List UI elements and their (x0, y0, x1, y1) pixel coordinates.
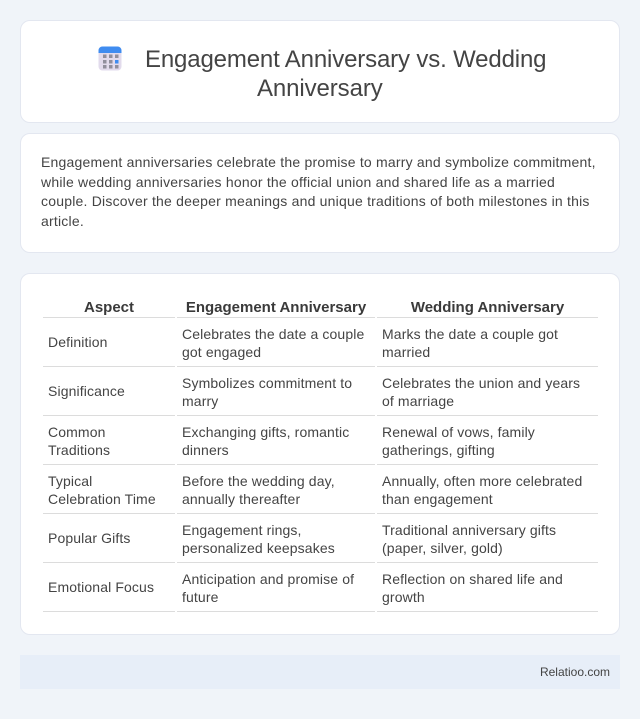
row: Significance: of marriage (382, 393, 454, 409)
row: Definition: Marks the date a couple got (382, 326, 558, 342)
row: Common Traditions: dinners (182, 442, 229, 458)
title: Anniversary (257, 75, 383, 102)
row: Typical Celebration Time: Annually, often more celebrated (382, 473, 582, 489)
row: Significance: Significance (48, 383, 125, 399)
row: Popular Gifts: Traditional anniversary gifts (382, 522, 556, 538)
row: Popular Gifts: Engagement rings, (182, 522, 302, 538)
row: Common Traditions: Renewal of vows, family (382, 424, 535, 440)
row: Popular Gifts (48, 522, 556, 556)
row: Typical Celebration Time: annually thereafter (182, 491, 300, 507)
row: Definition: Definition (48, 334, 108, 350)
row: Definition: married (382, 344, 430, 360)
intro text: article. (41, 213, 84, 229)
footer bar (20, 655, 620, 689)
row: Emotional Focus: Emotional Focus (48, 579, 154, 595)
row: Popular Gifts: personalized keepsakes (182, 540, 335, 556)
row: Definition (48, 326, 558, 360)
row: Definition: got engaged (182, 344, 261, 360)
panel: introduction (20, 133, 620, 253)
row: Significance: Celebrates the union and years (382, 375, 580, 391)
row: Common Traditions: gatherings, gifting (382, 442, 495, 458)
row: Significance: marry (182, 393, 218, 409)
table header: Wedding Anniversary (411, 299, 564, 316)
row: Popular Gifts: Popular Gifts (48, 530, 130, 546)
row: Emotional Focus: Reflection on shared life and (382, 571, 563, 587)
table header: Aspect (84, 299, 134, 316)
title (145, 46, 546, 102)
intro text: while wedding anniversaries honor the official union and shared life as a married (41, 174, 555, 190)
row: Typical Celebration Time (48, 473, 582, 507)
row: Common Traditions: Traditions (48, 442, 110, 458)
intro text: couple. Discover the deeper meanings and unique traditions of both milestones in this (41, 193, 590, 209)
row: Common Traditions: Common (48, 424, 106, 440)
row: Emotional Focus: Anticipation and promise of (182, 571, 354, 587)
table header: Engagement Anniversary (186, 299, 366, 316)
panel: comparison table (20, 273, 620, 635)
row: Common Traditions (48, 424, 535, 458)
row: Emotional Focus (48, 571, 563, 605)
row: Popular Gifts: (paper, silver, gold) (382, 540, 503, 556)
row: Typical Celebration Time: Celebration Time (48, 491, 156, 507)
title: Engagement Anniversary vs. Wedding (145, 46, 546, 73)
row: Significance (48, 375, 580, 409)
row: Emotional Focus: future (182, 589, 219, 605)
row: Definition: Celebrates the date a couple (182, 326, 364, 342)
footer text: Relatioo.com (540, 665, 610, 679)
row: Typical Celebration Time: Before the wedding day, (182, 473, 335, 489)
row: Common Traditions: Exchanging gifts, romantic (182, 424, 349, 440)
intro text: Engagement anniversaries celebrate the promise to marry and symbolize commitment, (41, 154, 596, 170)
row: Typical Celebration Time: Typical (48, 473, 92, 489)
table header (84, 299, 564, 316)
row: Significance: Symbolizes commitment to (182, 375, 352, 391)
icon: calendar (98, 46, 122, 70)
row: Typical Celebration Time: than engagement (382, 491, 493, 507)
panel: title card (20, 20, 620, 123)
row: Emotional Focus: growth (382, 589, 425, 605)
intro text (41, 154, 596, 229)
